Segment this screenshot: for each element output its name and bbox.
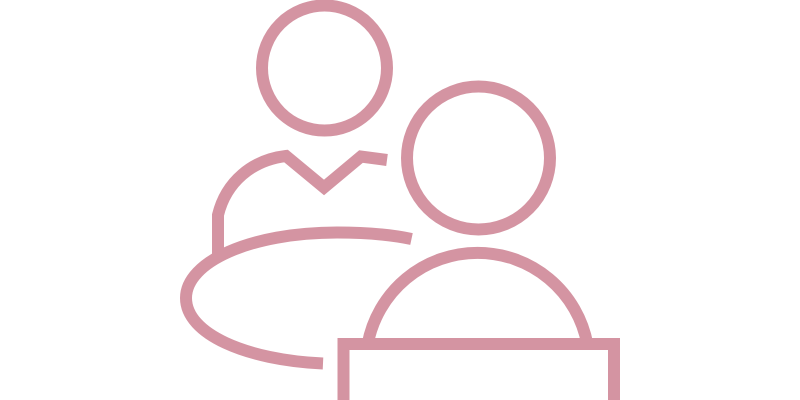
front person shoulders xyxy=(368,253,587,344)
back person shoulders and collar xyxy=(218,156,387,256)
back person head xyxy=(262,6,387,130)
meeting table xyxy=(186,232,412,364)
front person head xyxy=(407,86,550,230)
front laptop xyxy=(344,344,614,400)
